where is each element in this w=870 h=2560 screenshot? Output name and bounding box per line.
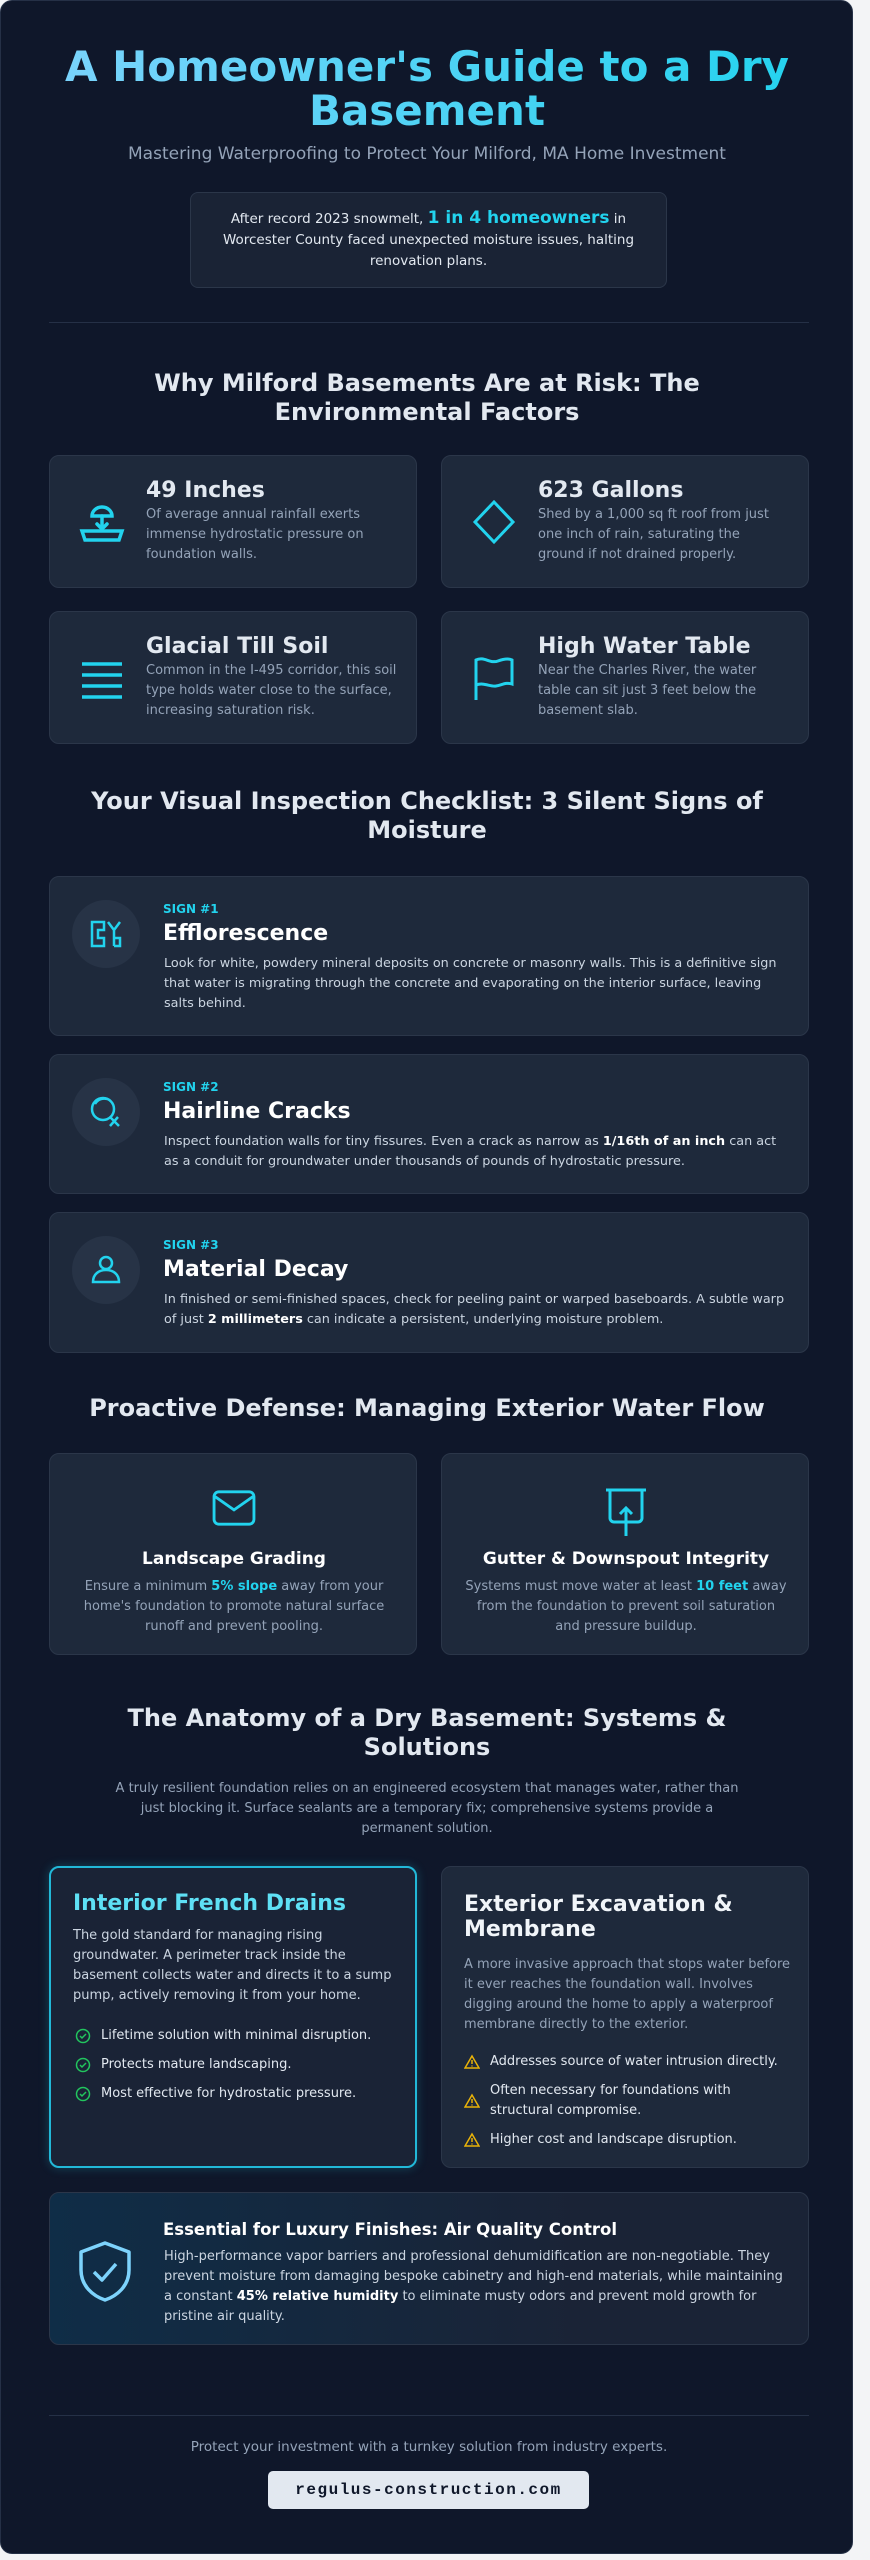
icon: fountain [80, 505, 124, 542]
panel: sign 1 [49, 876, 809, 1036]
callout: statistic: After record 2023 snowmelt, 1 in 4 homeowners in Worcester County faced unexpected moisture issues, halting renovation plans. [223, 208, 634, 269]
text: anatomy intro: A truly resilient foundation relies on an engineered ecosystem that manages water, rather than just blocking it. Surface sealants are a temporary fix; comprehensive systems provide a permanent solution. [116, 1781, 738, 1836]
panel: landscape grading [49, 1453, 417, 1655]
title: A Homeowner's Guide to a Dry Basement [65, 42, 789, 135]
icon: envelope [212, 1490, 256, 1526]
panel: air quality: High-performance vapor barriers and professional dehumidification are non-negotiable. They prevent moisture from damaging bespoke cabinetry and high-end materials, while maintaining a constant 45% relative humidity to eliminate musty odors and prevent mold growth for pristine air quality. [164, 2249, 783, 2324]
panel: air quality: Essential for Luxury Finishes: Air Quality Control [163, 2220, 617, 2239]
list: benefits: Most effective for hydrostatic pressure. [101, 2086, 356, 2101]
icon: diamond [473, 500, 515, 544]
panel: glacial till: Glacial Till Soil [146, 634, 328, 659]
button: website: regulus-construction.com [295, 2481, 562, 2499]
panel: sign 1: Efflorescence [163, 921, 328, 946]
footer text: Protect your investment with a turnkey solution from industry experts. [191, 2439, 667, 2455]
heading: proactive defense: Proactive Defense: Managing Exterior Water Flow [89, 1394, 765, 1422]
panel: sign 2: SIGN #2 [163, 1080, 219, 1094]
panel: 49 inches: 49 Inches [146, 478, 265, 503]
list: benefits: Protects mature landscaping. [101, 2057, 291, 2072]
panel: water table: High Water Table [538, 634, 751, 659]
panel: gutter integrity: Gutter & Downspout Integrity [483, 1549, 769, 1569]
heading: environmental factors: Why Milford Basements Are at Risk: The Environmental Factors [154, 369, 700, 426]
icon: person [72, 1236, 140, 1304]
panel: sign 1: SIGN #1 [163, 902, 219, 916]
callout: statistic [190, 192, 667, 288]
list: benefits: Lifetime solution with minimal disruption. [101, 2028, 371, 2043]
panel: exterior excavation: A more invasive approach that stops water before it ever reaches the foundation wall. Involves digging around the home to apply a waterproof membrane directly to the exterior. [464, 1957, 790, 2032]
list: benefits [76, 2028, 371, 2102]
heading: anatomy: The Anatomy of a Dry Basement: Systems & Solutions [128, 1704, 726, 1761]
panel: 49 inches [49, 455, 417, 588]
panel: air quality [49, 2192, 809, 2345]
panel: landscape grading: Landscape Grading [142, 1549, 326, 1569]
list: considerations [464, 2054, 778, 2147]
panel: interior french drains [49, 1866, 417, 2168]
panel: interior french drains: The gold standard for managing rising groundwater. A perimeter track inside the basement collects water and directs it to a sump pump, actively removing it from your home. [73, 1928, 391, 2003]
panel: sign 3: SIGN #3 [163, 1238, 219, 1252]
panel: sign 2: Hairline Cracks [163, 1099, 351, 1124]
subtitle: Mastering Waterproofing to Protect Your Milford, MA Home Investment [128, 144, 726, 164]
panel: exterior excavation: Exterior Excavation & Membrane [464, 1892, 733, 1942]
list: considerations: Often necessary for foundations with structural compromise. [490, 2083, 731, 2118]
list: considerations: Higher cost and landscape disruption. [490, 2132, 737, 2147]
panel: water table [441, 611, 809, 744]
panel: glacial till: Common in the I-495 corridor, this soil type holds water close to the surface, increasing saturation risk. [146, 663, 396, 718]
panel: gutter integrity [441, 1453, 809, 1655]
icon: efflorescence [72, 900, 140, 968]
panel: sign 2: Inspect foundation walls for tiny fissures. Even a crack as narrow as 1/16th of an inch can act as a conduit for groundwater under thousands of pounds of hydrostatic pressure. [164, 1134, 776, 1169]
panel: sign 3: In finished or semi-finished spaces, check for peeling paint or warped baseboards. A subtle warp of just 2 millimeters can indicate a persistent, underlying moisture problem. [164, 1292, 784, 1327]
panel: 623 gallons: 623 Gallons [538, 478, 683, 503]
panel: sign 3 [49, 1212, 809, 1353]
icon: flag [474, 657, 514, 700]
heading: inspection checklist: Your Visual Inspection Checklist: 3 Silent Signs of Moisture [91, 787, 763, 844]
panel: interior french drains: Interior French Drains [73, 1891, 346, 1916]
icon: crack magnifier [72, 1078, 140, 1146]
panel: gutter integrity: Systems must move water at least 10 feet away from the foundation to prevent soil saturation and pressure buildup. [465, 1579, 787, 1634]
panel: landscape grading: Ensure a minimum 5% slope away from your home's foundation to promote natural surface runoff and prevent pooling. [84, 1579, 384, 1634]
panel: 623 gallons: Shed by a 1,000 sq ft roof from just one inch of rain, saturating the ground if not drained properly. [538, 507, 769, 562]
button: website [268, 2471, 589, 2509]
panel: glacial till [49, 611, 417, 744]
panel: water table: Near the Charles River, the water table can sit just 3 feet below the basement slab. [538, 663, 756, 718]
icon: shield [79, 2241, 131, 2302]
panel: 623 gallons [441, 455, 809, 588]
list: considerations: Addresses source of water intrusion directly. [490, 2054, 778, 2069]
panel: 49 inches: Of average annual rainfall exerts immense hydrostatic pressure on foundation walls. [146, 507, 364, 562]
icon: upload board [606, 1488, 646, 1536]
panel: sign 2 [49, 1054, 809, 1194]
panel: exterior excavation [441, 1866, 809, 2168]
icon: lines [82, 662, 122, 699]
panel: sign 1: Look for white, powdery mineral deposits on concrete or masonry walls. This is a definitive sign that water is migrating through the concrete and evaporating on the interior surface, leaving salts behind. [164, 956, 777, 1011]
panel: sign 3: Material Decay [163, 1257, 348, 1282]
